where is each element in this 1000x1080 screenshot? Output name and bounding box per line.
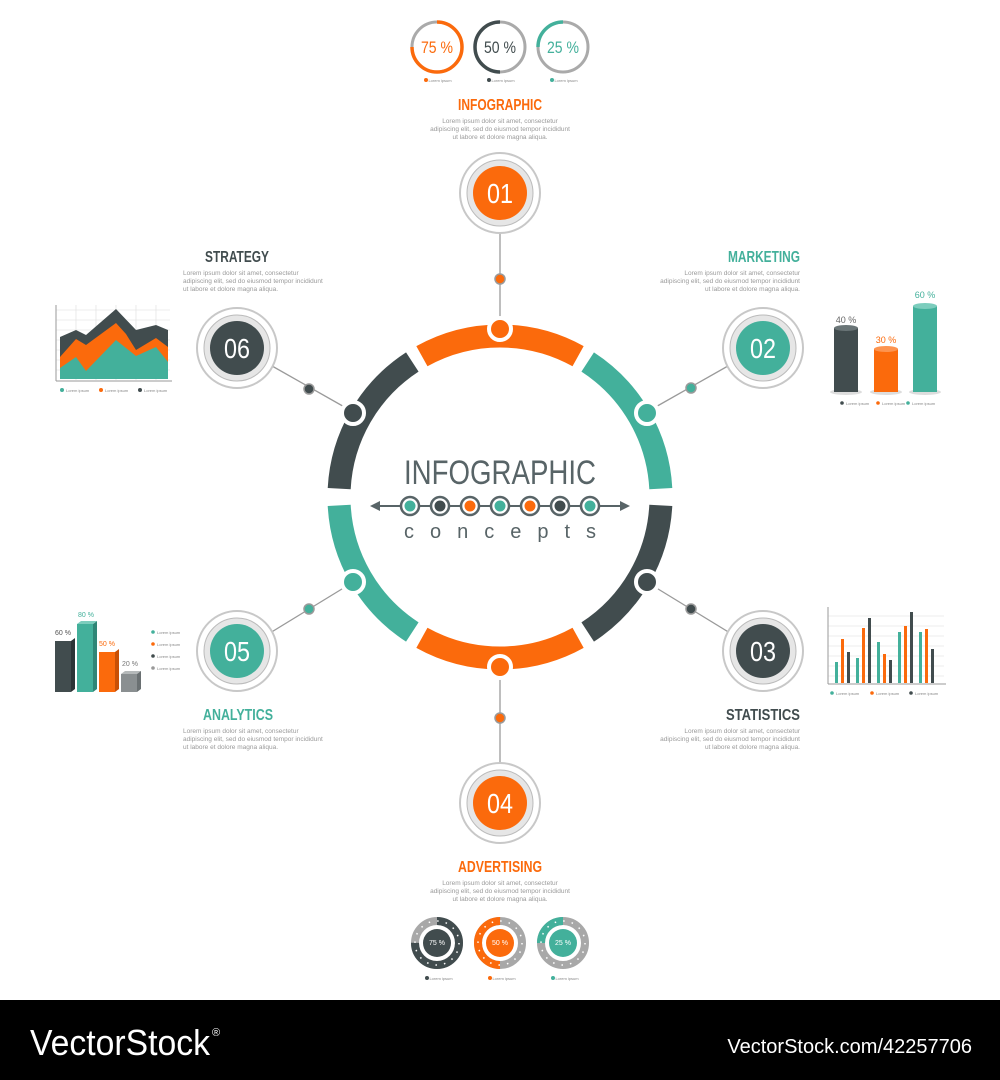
top percentage circles: Lorem ipsum xyxy=(554,78,578,83)
ring xyxy=(339,336,661,658)
text: analytics: Lorem ipsum dolor sit amet, consectetur xyxy=(183,728,299,735)
analytics bar chart: Lorem ipsum xyxy=(157,654,181,659)
footer bar xyxy=(0,1000,1000,1080)
text: infographic: INFOGRAPHIC xyxy=(458,97,542,114)
connectors xyxy=(265,233,735,763)
bottom donuts: Lorem ipsum xyxy=(492,976,516,981)
text: advertising: ADVERTISING xyxy=(458,859,542,876)
text: statistics: STATISTICS xyxy=(726,707,800,724)
text: advertising: adipiscing elit, sed do eiusmod tempor incididunt xyxy=(430,888,570,895)
text: analytics: ut labore et dolore magna aliqua. xyxy=(183,744,278,751)
bottom donuts: Lorem ipsum xyxy=(555,976,579,981)
strategy area chart: Lorem ipsum xyxy=(144,388,168,393)
analytics bar chart: 60 % xyxy=(55,630,71,637)
text: strategy: Lorem ipsum dolor sit amet, consectetur xyxy=(183,270,299,277)
marketing cylinder chart: Lorem ipsum xyxy=(846,401,870,406)
marketing cylinder chart: 40 % xyxy=(836,315,856,325)
statistics bar chart: Lorem ipsum xyxy=(915,691,939,696)
text: analytics xyxy=(183,707,323,751)
strategy area chart: Lorem ipsum xyxy=(66,388,90,393)
center title: INFOGRAPHIC xyxy=(404,454,596,492)
text: marketing: ut labore et dolore magna aliqua. xyxy=(705,286,800,293)
top percentage circles: 25 % xyxy=(547,38,579,57)
statistics bar chart xyxy=(828,607,946,696)
footer bar: ® xyxy=(212,1027,220,1039)
badges xyxy=(197,153,803,843)
strategy area chart xyxy=(56,305,172,393)
text: marketing: Lorem ipsum dolor sit amet, consectetur xyxy=(684,270,801,277)
footer bar: VectorStock xyxy=(30,1022,211,1063)
statistics bar chart: Lorem ipsum xyxy=(876,691,900,696)
text: analytics: ANALYTICS xyxy=(203,707,273,724)
top percentage circles: 50 % xyxy=(484,38,516,57)
analytics bar chart xyxy=(55,612,181,692)
analytics bar chart: Lorem ipsum xyxy=(157,630,181,635)
text: marketing: adipiscing elit, sed do eiusmod tempor incididunt xyxy=(660,278,800,285)
top percentage circles: 75 % xyxy=(421,38,453,57)
text: infographic xyxy=(430,97,570,141)
analytics bar chart: 20 % xyxy=(122,661,138,668)
text: advertising: Lorem ipsum dolor sit amet, consectetur xyxy=(442,880,559,887)
bottom donuts: 75 % xyxy=(429,940,445,947)
text: marketing xyxy=(660,249,801,293)
center title xyxy=(370,454,630,543)
marketing cylinder chart: 60 % xyxy=(915,290,935,300)
text: strategy xyxy=(183,249,323,293)
analytics bar chart: Lorem ipsum xyxy=(157,642,181,647)
badges: 06 xyxy=(224,333,250,364)
marketing cylinder chart: Lorem ipsum xyxy=(882,401,906,406)
top percentage circles: Lorem ipsum xyxy=(428,78,452,83)
text: advertising xyxy=(430,859,570,903)
badges: 05 xyxy=(224,636,250,667)
text: statistics: ut labore et dolore magna aliqua. xyxy=(705,744,800,751)
text: analytics: adipiscing elit, sed do eiusmod tempor incididunt xyxy=(183,736,323,743)
text: infographic: ut labore et dolore magna aliqua. xyxy=(452,134,548,141)
top percentage circles xyxy=(412,22,588,83)
text: strategy: adipiscing elit, sed do eiusmod tempor incididunt xyxy=(183,278,323,285)
center title: concepts xyxy=(404,521,596,543)
text: strategy: ut labore et dolore magna aliqua. xyxy=(183,286,278,293)
analytics bar chart: 50 % xyxy=(99,641,115,648)
text: infographic: Lorem ipsum dolor sit amet, consectetur xyxy=(442,118,559,125)
footer bar: VectorStock.com/42257706 xyxy=(727,1036,972,1058)
text: strategy: STRATEGY xyxy=(205,249,269,266)
text: infographic: adipiscing elit, sed do eiusmod tempor incididunt xyxy=(430,126,570,133)
analytics bar chart: Lorem ipsum xyxy=(157,666,181,671)
connector dots xyxy=(304,274,696,723)
text: statistics: adipiscing elit, sed do eiusmod tempor incididunt xyxy=(660,736,800,743)
badges: 01 xyxy=(487,178,513,209)
text: marketing: MARKETING xyxy=(728,249,800,266)
text: statistics xyxy=(660,707,801,751)
badges: 03 xyxy=(750,636,776,667)
badges: 02 xyxy=(750,333,776,364)
bottom donuts: Lorem ipsum xyxy=(429,976,453,981)
statistics bar chart: Lorem ipsum xyxy=(836,691,860,696)
ring nodes xyxy=(342,318,658,678)
text: advertising: ut labore et dolore magna aliqua. xyxy=(452,896,548,903)
bottom donuts: 25 % xyxy=(555,940,571,947)
badges: 04 xyxy=(487,788,513,819)
text: statistics: Lorem ipsum dolor sit amet, consectetur xyxy=(684,728,801,735)
bottom donuts xyxy=(415,921,585,981)
marketing cylinder chart: 30 % xyxy=(876,335,896,345)
strategy area chart: Lorem ipsum xyxy=(105,388,129,393)
marketing cylinder chart: Lorem ipsum xyxy=(912,401,936,406)
analytics bar chart: 80 % xyxy=(78,612,94,619)
marketing cylinder chart xyxy=(830,290,941,406)
bottom donuts: 50 % xyxy=(492,940,508,947)
top percentage circles: Lorem ipsum xyxy=(491,78,515,83)
